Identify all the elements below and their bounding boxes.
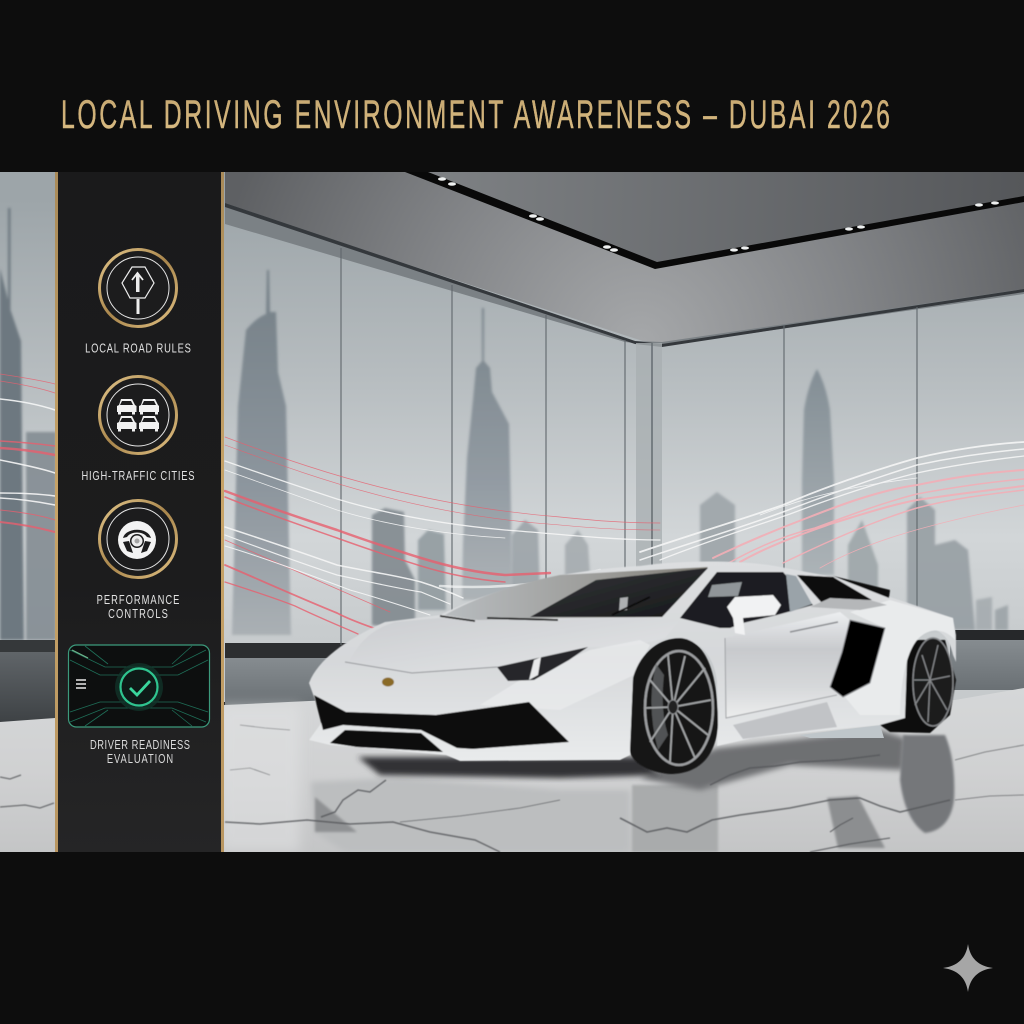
label: performance controls: PERFORMANCE	[97, 594, 180, 607]
mirror	[727, 595, 781, 635]
wipers	[440, 597, 650, 621]
car reflection on floor	[311, 725, 954, 852]
ceiling	[225, 172, 1024, 345]
readiness card	[68, 645, 210, 727]
headlight	[497, 647, 588, 681]
car	[309, 562, 956, 774]
icon: sparkle watermark	[943, 944, 993, 992]
door handle line	[790, 622, 838, 632]
icon: road sign	[100, 250, 176, 326]
title: LOCAL DRIVING ENVIRONMENT AWARENESS – DUBAI 2026	[61, 93, 890, 138]
windshield	[445, 567, 708, 620]
ceiling light strip	[405, 172, 1024, 269]
skyline	[0, 208, 1008, 640]
marble veins	[0, 725, 1024, 852]
badge	[382, 678, 394, 686]
front wheel	[630, 638, 718, 774]
label: local road rules: LOCAL ROAD RULES	[85, 342, 191, 356]
rear window	[797, 575, 872, 603]
icon: steering wheel	[100, 500, 176, 578]
sidebar panel	[55, 172, 224, 852]
label: driver readiness evaluation: DRIVER READINESS	[90, 739, 190, 752]
marble floor	[0, 688, 1024, 852]
window base and lake	[0, 652, 55, 722]
glass walls	[0, 172, 1024, 702]
label: driver readiness evaluation: EVALUATION	[107, 753, 173, 766]
lower intake	[314, 695, 569, 749]
rear wheel	[880, 638, 956, 733]
window mullions	[341, 248, 917, 645]
rear haunch	[845, 600, 955, 715]
label: performance controls	[97, 594, 180, 621]
side window	[680, 572, 813, 628]
car body	[309, 562, 956, 761]
showroom scene	[0, 172, 1024, 852]
front splitter	[330, 730, 443, 752]
light streaks	[0, 374, 1024, 634]
side intake	[830, 620, 885, 697]
label: driver readiness evaluation	[90, 739, 190, 766]
hood highlight	[374, 618, 477, 634]
door panel	[725, 612, 850, 718]
label: high-traffic cities: HIGH-TRAFFIC CITIES	[81, 470, 195, 483]
icon: four cars	[100, 376, 176, 454]
engine deck	[810, 598, 887, 610]
sill scoop	[733, 702, 837, 739]
label: performance controls: CONTROLS	[108, 608, 168, 621]
